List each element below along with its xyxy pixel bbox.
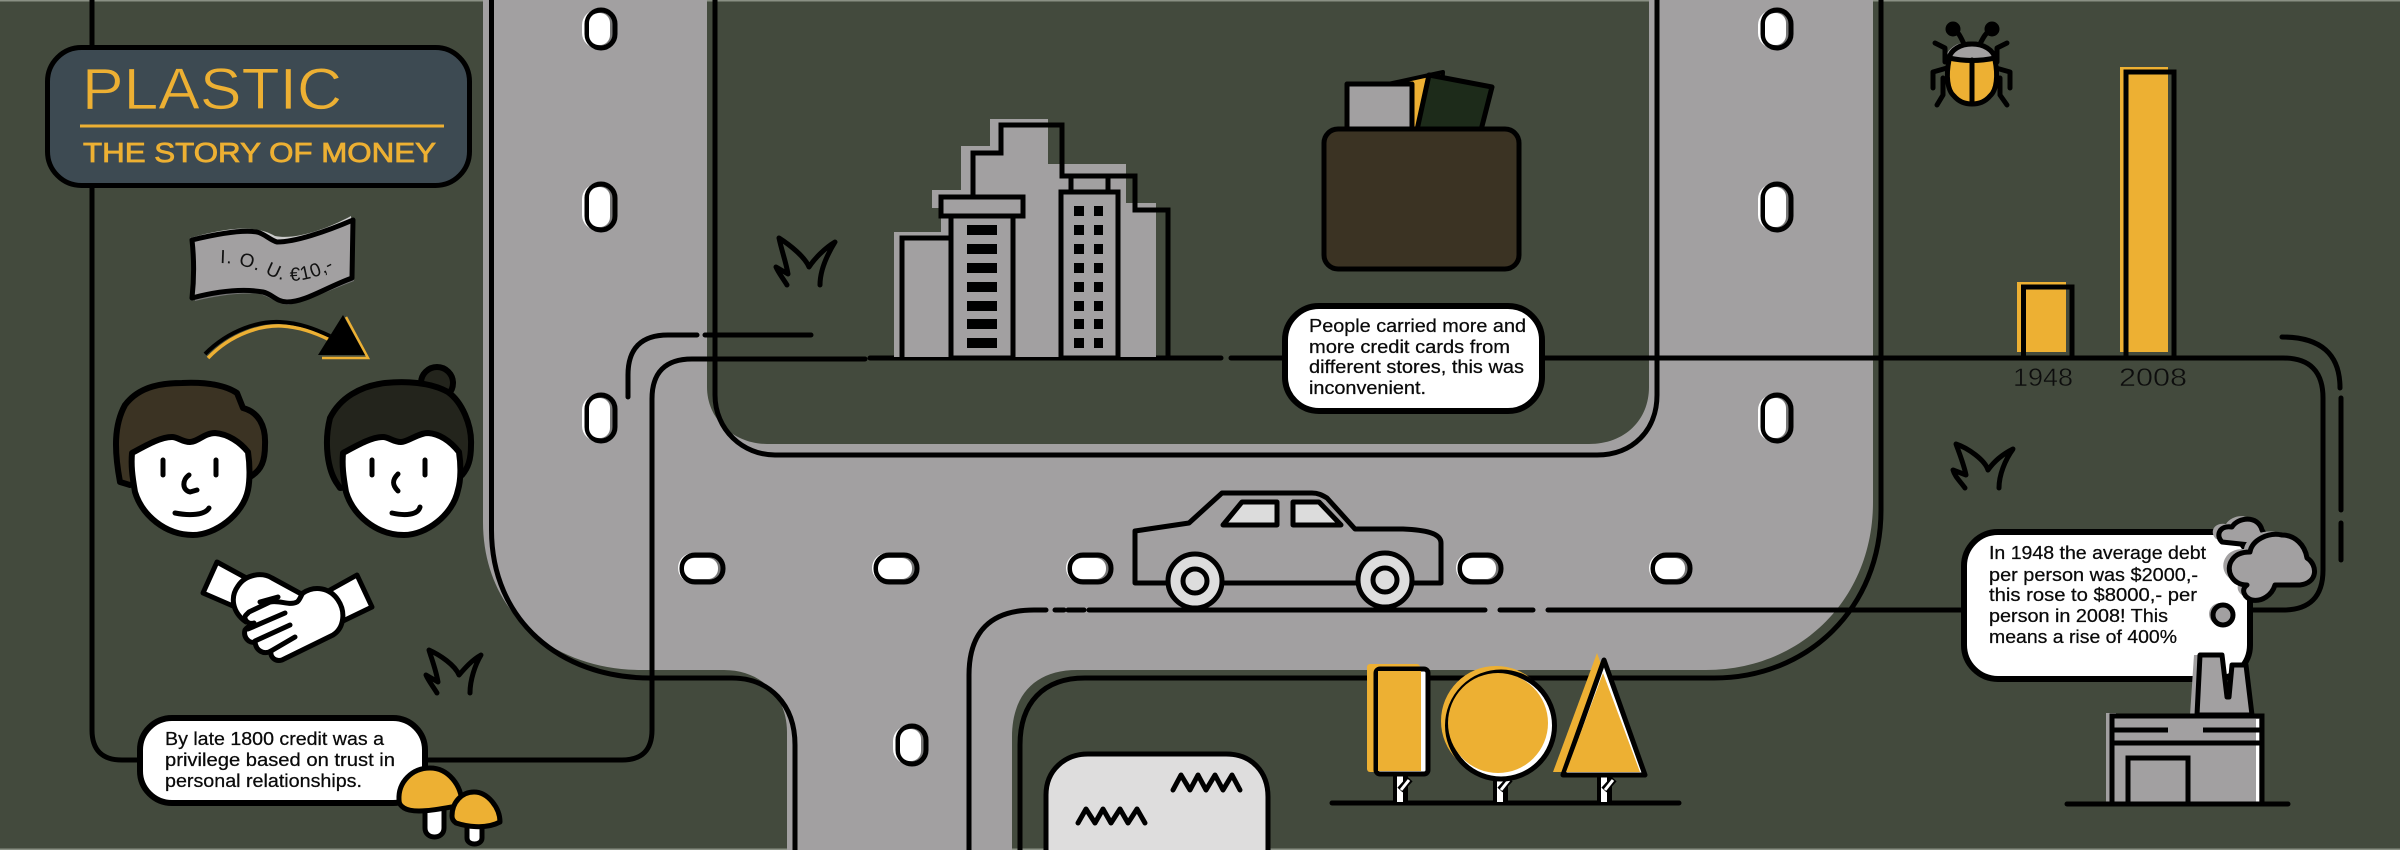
callout: more credit cards: People carried more and bbox=[1309, 316, 1526, 336]
callout: credit as privilege: privilege based on trust in bbox=[165, 750, 395, 770]
callout: debt statistic: In 1948 the average debt bbox=[1989, 543, 2206, 563]
callout: more credit cards: inconvenient. bbox=[1309, 378, 1426, 398]
rectangular tree bbox=[1367, 664, 1428, 774]
title panel bbox=[48, 48, 470, 186]
callout: debt statistic: this rose to $8000,- per bbox=[1989, 585, 2197, 605]
callout: debt statistic: person in 2008! This bbox=[1989, 606, 2168, 626]
icon: IOU note bbox=[190, 216, 356, 305]
panel: pale sign bbox=[1046, 754, 1268, 850]
icon: mushrooms bbox=[399, 768, 500, 844]
icon: zigzag upper bbox=[1173, 775, 1240, 790]
icon: car bbox=[1135, 493, 1441, 608]
icon: grass right bbox=[1953, 444, 2013, 488]
icon: right person face bbox=[327, 367, 471, 535]
callout: credit as privilege bbox=[140, 718, 425, 803]
callout: more credit cards: different stores, this was bbox=[1309, 357, 1524, 377]
label 1948: 1948 bbox=[2013, 364, 2073, 392]
road surface bbox=[483, 0, 1873, 850]
icon: beetle bbox=[1933, 24, 2010, 105]
arrow: loan direction bbox=[205, 315, 368, 358]
bar chart: average debt bbox=[2013, 67, 2187, 392]
road edge lines bbox=[492, 0, 1881, 850]
icon: grass left bbox=[426, 650, 481, 693]
callout: debt statistic bbox=[1964, 532, 2250, 679]
icon: zigzag lower bbox=[1078, 809, 1145, 823]
icon: handshake bbox=[203, 562, 372, 660]
bar 2008 bbox=[2120, 67, 2174, 357]
bar 1948 bbox=[2017, 282, 2072, 357]
callout: debt statistic: per person was $2000,- bbox=[1989, 565, 2198, 585]
triangular tree bbox=[1553, 653, 1645, 775]
callout: debt statistic: means a rise of 400% bbox=[1989, 627, 2177, 647]
icon: IOU note: I. O. U. €10,- bbox=[222, 250, 332, 281]
icon: wallet with cards bbox=[1324, 72, 1519, 269]
round tree bbox=[1441, 666, 1554, 779]
heading: PLASTIC: PLASTIC bbox=[82, 57, 342, 122]
callout: credit as privilege: By late 1800 credit was a bbox=[165, 729, 385, 749]
callout: more credit cards bbox=[1285, 306, 1542, 411]
subheading: the story of money: THE STORY OF MONEY bbox=[83, 137, 436, 168]
lane markers bbox=[582, 10, 1791, 764]
left tower bbox=[941, 197, 1023, 358]
callout: more credit cards: more credit cards from bbox=[1309, 337, 1510, 357]
tree stems bbox=[1393, 775, 1614, 802]
icon: city buildings bbox=[894, 119, 1168, 358]
callout: credit as privilege: personal relationships. bbox=[165, 771, 362, 791]
icon: factory bbox=[2067, 655, 2288, 804]
icon: grass centre bbox=[776, 238, 835, 285]
icon: smoke clouds bbox=[2209, 516, 2315, 625]
label 2008: 2008 bbox=[2119, 364, 2187, 392]
icon: trees bbox=[1332, 653, 1679, 803]
right tower bbox=[1061, 176, 1118, 358]
icon: left person face bbox=[116, 383, 265, 535]
